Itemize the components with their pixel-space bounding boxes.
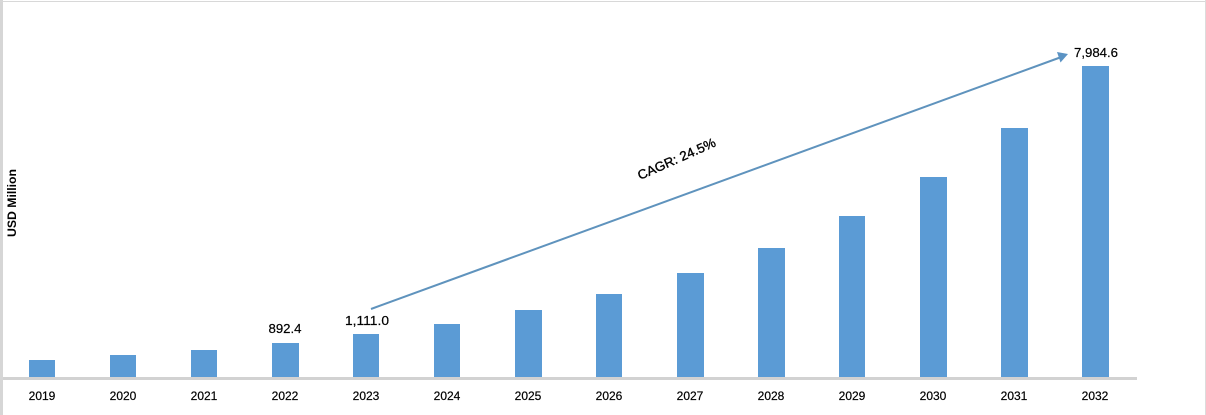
x axis year labels: 2023: [353, 389, 380, 403]
x axis year labels: 2027: [677, 389, 704, 403]
x axis year labels: 2024: [434, 389, 461, 403]
x axis year labels: 2020: [110, 389, 137, 403]
value label 2032: 7,984.6: [1074, 45, 1118, 60]
CAGR arrow: [371, 52, 1068, 309]
x axis year labels: 2019: [29, 389, 56, 403]
x axis year labels: 2032: [1082, 389, 1109, 403]
x axis year labels: 2029: [839, 389, 866, 403]
value label 2023: 1,111.0: [345, 313, 389, 328]
x axis year labels: 2026: [596, 389, 623, 403]
x axis year labels: 2021: [191, 389, 218, 403]
x axis year labels: 2030: [920, 389, 947, 403]
y axis title: USD Million: [7, 169, 19, 237]
x axis line: [3, 377, 1137, 380]
CAGR label: CAGR: 24.5%: [635, 135, 718, 183]
x axis year labels: [29, 389, 1109, 403]
x axis year labels: 2022: [272, 389, 299, 403]
x axis year labels: 2025: [515, 389, 542, 403]
x axis year labels: 2031: [1001, 389, 1028, 403]
bars: [29, 66, 1109, 378]
x axis year labels: 2028: [758, 389, 785, 403]
value label 2022: 892.4: [268, 321, 302, 336]
